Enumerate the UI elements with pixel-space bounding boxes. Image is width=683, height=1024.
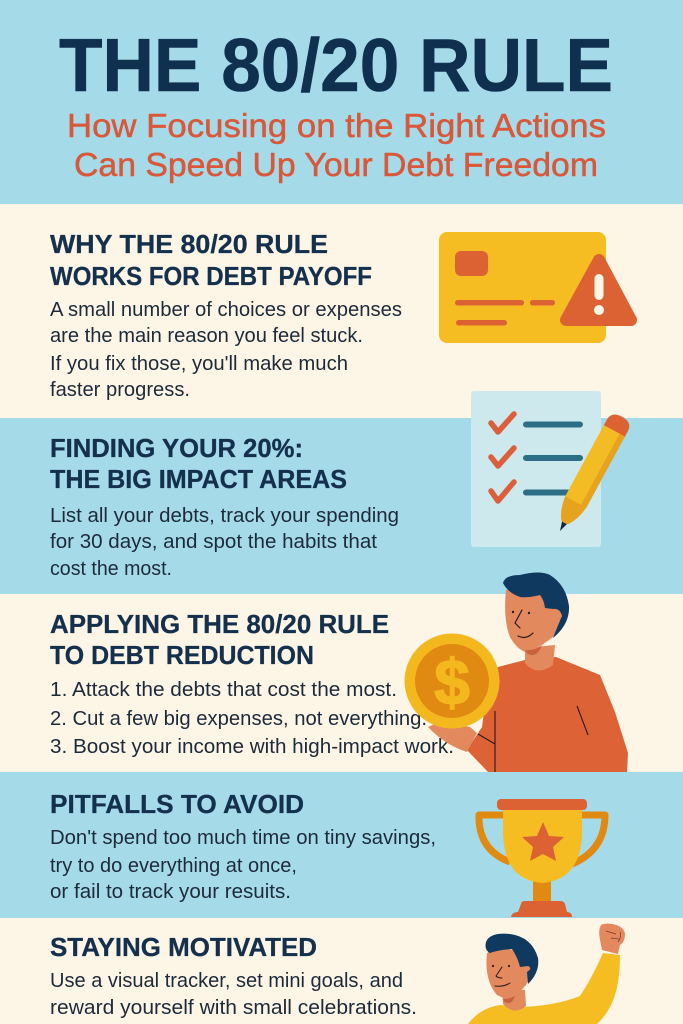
- subtitle: Can Speed Up Your Debt Freedom: [74, 146, 598, 183]
- text block: why the rule works: [50, 299, 402, 401]
- panel: staying motivated: [0, 918, 683, 1024]
- heading: why the rule works: WORKS FOR DEBT PAYOFF: [50, 261, 372, 291]
- panel: finding your 20%: [0, 391, 683, 594]
- text block: staying motivated: [50, 970, 417, 1019]
- icon: credit card with warning: [439, 232, 631, 343]
- heading: applying the rule: TO DEBT REDUCTION: [50, 640, 314, 670]
- heading: finding your 20%: [50, 433, 347, 494]
- title: THE 80/20 RULE: [59, 23, 613, 107]
- panel: header: [0, 0, 683, 204]
- panel: pitfalls to avoid: [0, 772, 683, 918]
- text block: pitfalls to avoid: Don't spend too much time on tiny savings,: [50, 827, 436, 849]
- heading: applying the rule: [50, 609, 389, 670]
- text block: finding your 20%: [50, 505, 399, 580]
- heading: why the rule works: WHY THE 80/20 RULE: [50, 229, 328, 259]
- icon: checklist and pencil: [471, 391, 633, 547]
- text block: numbered actions: 1. Attack the debts that cost the most.: [50, 679, 397, 701]
- heading: applying the rule: APPLYING THE 80/20 RULE: [50, 609, 389, 639]
- text block: why the rule works: faster progress.: [50, 379, 190, 401]
- text block: staying motivated: Use a visual tracker, set mini goals, and: [50, 970, 403, 992]
- text block: finding your 20%: List all your debts, track your spending: [50, 505, 399, 527]
- heading: pitfalls to avoid: PITFALLS TO AVOID: [50, 789, 304, 819]
- icon: man cheering: [468, 924, 625, 1024]
- text block: pitfalls to avoid: [50, 827, 436, 903]
- heading: why the rule works: [50, 229, 372, 291]
- panel: applying the rule: [0, 572, 683, 772]
- text block: staying motivated: reward yourself with small celebrations.: [50, 997, 417, 1019]
- text block: why the rule works: A small number of choices or expenses: [50, 299, 402, 321]
- text block: why the rule works: If you fix those, you'll make much: [50, 353, 348, 375]
- text block: finding your 20%: for 30 days, and spot the habits that: [50, 531, 377, 553]
- text block: why the rule works: are the main reason you feel stuck.: [50, 325, 363, 347]
- heading: finding your 20%: THE BIG IMPACT AREAS: [50, 464, 347, 494]
- text block: pitfalls to avoid: or fail to track your resuits.: [50, 881, 291, 903]
- subtitle: [67, 107, 606, 183]
- text block: pitfalls to avoid: try to do everything at once,: [50, 855, 297, 877]
- text block: numbered actions: [50, 679, 454, 758]
- subtitle: How Focusing on the Right Actions: [67, 107, 606, 144]
- text block: numbered actions: 2. Cut a few big expenses, not everything.: [50, 708, 427, 730]
- icon: trophy: [479, 799, 605, 917]
- icon: man holding coin: [404, 572, 628, 772]
- heading: staying motivated: STAYING MOTIVATED: [50, 932, 317, 962]
- text block: numbered actions: 3. Boost your income with high-impact work.: [50, 736, 454, 758]
- text block: finding your 20%: cost the most.: [50, 558, 172, 580]
- icon: man holding coin: $: [434, 646, 470, 718]
- panel: why the rule works: [0, 204, 683, 418]
- heading: finding your 20%: FINDING YOUR 20%:: [50, 433, 303, 463]
